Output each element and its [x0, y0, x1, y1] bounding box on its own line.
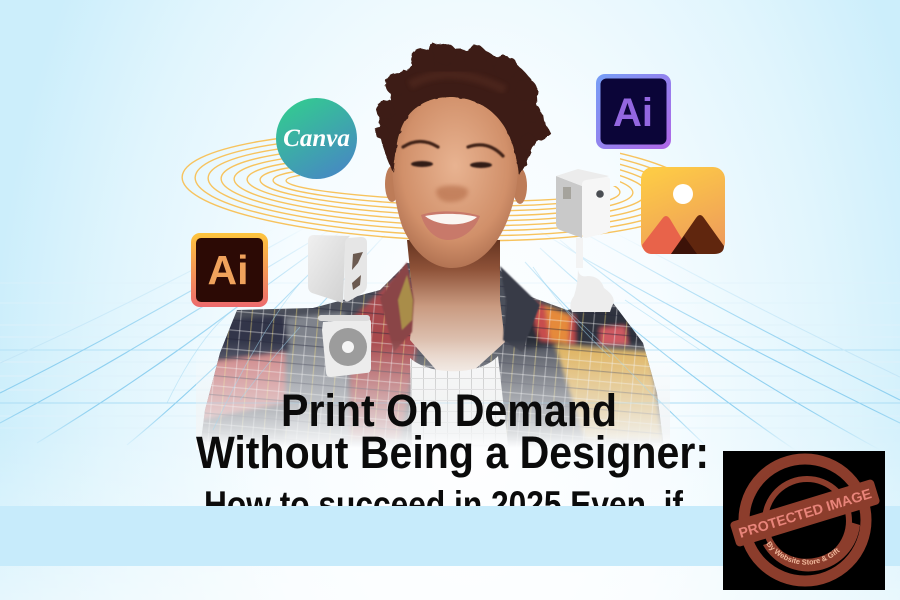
person portrait: [196, 43, 670, 450]
device: right plug with cable: [556, 169, 614, 312]
eyebrows: [403, 142, 503, 156]
title line 1: Print On Demand: [281, 385, 617, 436]
icon: Canva: Canva: [283, 125, 350, 152]
watermark: protected image stamp: [723, 451, 885, 590]
icon: Canva: [276, 98, 357, 179]
shirt: [198, 260, 668, 450]
icon: Ai purple: [596, 74, 671, 149]
title line 2: Without Being a Designer:: [196, 427, 709, 478]
device: speaker on shoulder: [318, 315, 371, 377]
watermark: protected image stamp: By Website Store & Gift: [766, 541, 840, 565]
ears: [385, 166, 527, 204]
mouth: [421, 211, 480, 240]
bottom band: [0, 506, 900, 566]
shirt collars: [380, 262, 540, 352]
title: [196, 393, 706, 506]
face: [392, 92, 518, 268]
neck and chest: [407, 240, 505, 372]
shirt fade: [196, 338, 670, 450]
watermark: protected image stamp: Your Protected Image Store: [755, 495, 756, 496]
perspective grid floor: [0, 215, 900, 450]
icon: Ai purple: Ai: [613, 91, 653, 135]
title line 3 (clipped by band): How to succeed in 2025 Even, if: [204, 484, 684, 525]
icon: Ai orange: Ai: [208, 247, 248, 293]
nose: [436, 186, 468, 202]
icon: Ai orange: [191, 233, 268, 307]
eyes: [411, 161, 492, 168]
stamp banner: PROTECTED IMAGE: [737, 485, 873, 541]
icon: image tile: [641, 167, 725, 254]
faint grid lines over shirt: [0, 267, 900, 430]
hair: [375, 43, 551, 175]
white tee: [410, 356, 508, 445]
orbit rings: [181, 138, 666, 242]
device: left plug adapter: [308, 235, 367, 303]
